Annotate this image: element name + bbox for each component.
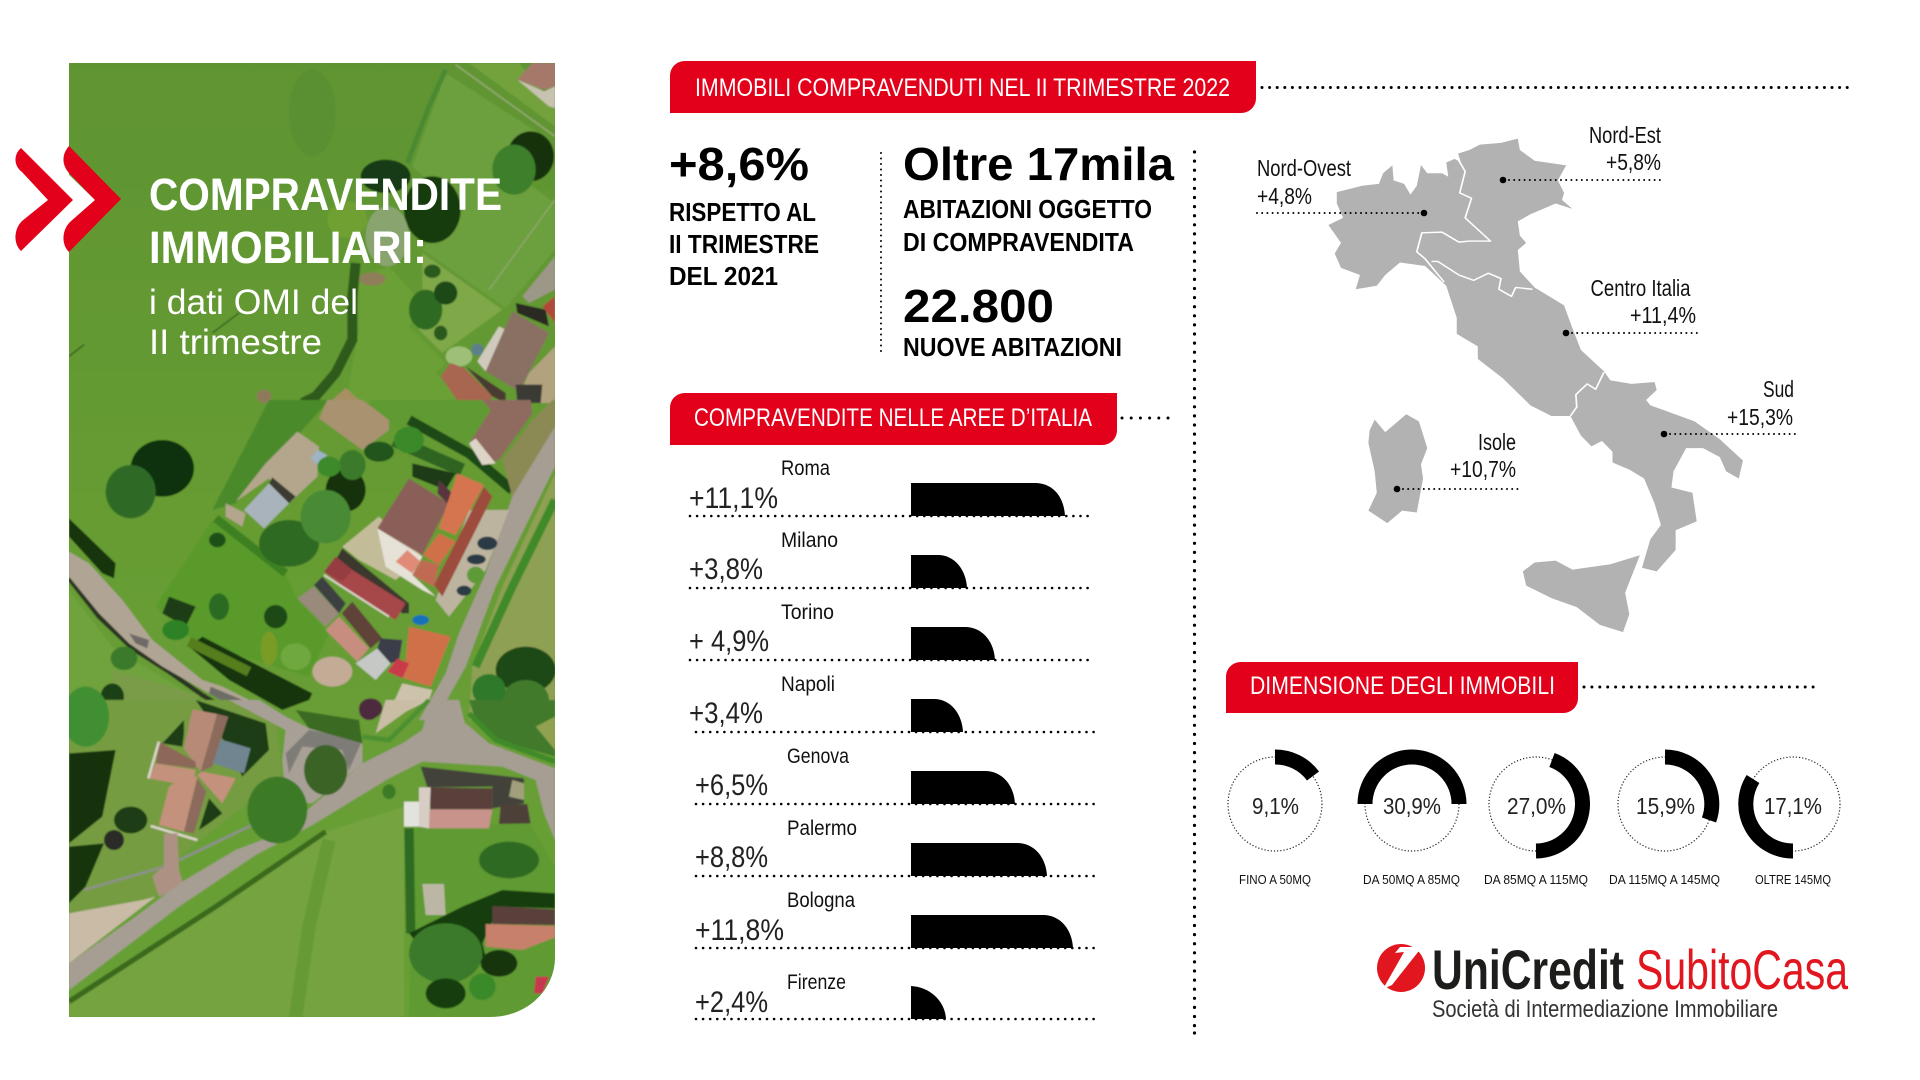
row: Roma: +11,1% — [689, 482, 778, 515]
row: Genova: +6,5% — [695, 769, 768, 802]
map label: Nord-Ovest: Nord-Ovest — [1257, 155, 1351, 181]
donut: oltre 145mq: OLTRE 145MQ — [1755, 872, 1831, 887]
title: i dati OMI del — [149, 283, 358, 322]
donut: da 85mq a 115mq: 27,0% — [1507, 793, 1566, 819]
row: Milano — [689, 529, 1091, 588]
map label: Isole — [1394, 429, 1518, 492]
map label: Isole: +10,7% — [1450, 456, 1516, 482]
heading: immobili compravenduti: IMMOBILI COMPRAVENDUTI NEL II TRIMESTRE 2022 — [695, 74, 1230, 102]
map label: Centro Italia: Centro Italia — [1590, 275, 1691, 301]
donut: da 85mq a 115mq — [1484, 757, 1588, 887]
stat: 22.800: 22.800 — [903, 280, 1054, 332]
stat: +8,6%: RISPETTO AL — [669, 197, 816, 227]
row: Bologna: Bologna — [787, 889, 855, 912]
row: Roma: Roma — [781, 457, 830, 480]
map label: Nord-Est — [1500, 122, 1663, 183]
logo: UniCredit SubitoCasa — [1377, 938, 1849, 1023]
map label: Sud — [1661, 376, 1795, 437]
row: Palermo: Palermo — [787, 817, 857, 840]
heading: dimensione degli immobili: DIMENSIONE DEGLI IMMOBILI — [1250, 672, 1555, 700]
donut: da 85mq a 115mq: DA 85MQ A 115MQ — [1484, 872, 1588, 887]
row: Roma — [689, 457, 1091, 516]
donut: fino a 50mq: 9,1% — [1252, 793, 1299, 819]
heading: aree d'italia: COMPRAVENDITE NELLE AREE D’ITALIA — [694, 404, 1092, 432]
bar chart: compravendite per città — [689, 457, 1096, 1019]
stat: oltre 17mila: Oltre 17mila — [903, 138, 1174, 190]
donut: da 115mq a 145mq: DA 115MQ A 145MQ — [1609, 872, 1720, 887]
heading: aree d'italia — [670, 393, 1168, 445]
map label: Sud: +15,3% — [1727, 404, 1793, 430]
icon: double red chevron — [15, 146, 121, 252]
logo: UniCredit SubitoCasa: Società di Intermediazione Immobiliare — [1432, 996, 1778, 1023]
map label: Centro Italia: +11,4% — [1630, 302, 1696, 328]
row: Torino: + 4,9% — [689, 625, 769, 658]
stat: 22.800 — [903, 280, 1122, 362]
map label: Nord-Ovest: +4,8% — [1257, 183, 1312, 209]
donut: da 115mq a 145mq: 15,9% — [1636, 793, 1695, 819]
row: Torino: Torino — [781, 601, 834, 624]
stat: oltre 17mila — [903, 138, 1174, 257]
panel: aerial photo of houses and fields — [60, 55, 565, 1025]
logo: UniCredit SubitoCasa: SubitoCasa — [1636, 938, 1849, 1001]
donut: da 50mq a 85mq — [1363, 757, 1460, 887]
row: Torino — [689, 601, 1091, 660]
map label: Sud: Sud — [1763, 376, 1794, 402]
heading: dimensione degli immobili — [1226, 662, 1818, 713]
stat: oltre 17mila: DI COMPRAVENDITA — [903, 227, 1134, 257]
stat: oltre 17mila: ABITAZIONI OGGETTO — [903, 194, 1152, 224]
donut: da 50mq a 85mq: DA 50MQ A 85MQ — [1363, 872, 1460, 887]
row: Firenze — [695, 971, 1096, 1019]
map label: Isole: Isole — [1478, 429, 1516, 455]
row: Milano: +3,8% — [689, 553, 763, 586]
row: Napoli: Napoli — [781, 673, 835, 696]
donut: da 50mq a 85mq: 30,9% — [1383, 793, 1441, 819]
title: IMMOBILIARI: — [149, 222, 427, 273]
logo: UniCredit SubitoCasa: UniCredit — [1432, 938, 1624, 1001]
map label: Nord-Est: Nord-Est — [1589, 122, 1661, 148]
map label: Nord-Ovest — [1257, 155, 1427, 216]
map label: Nord-Est: +5,8% — [1606, 149, 1661, 175]
stat: +8,6%: DEL 2021 — [669, 261, 778, 291]
row: Palermo: +8,8% — [695, 841, 768, 874]
donut: oltre 145mq: 17,1% — [1764, 793, 1822, 819]
title — [149, 169, 502, 362]
row: Genova: Genova — [787, 745, 849, 768]
title: COMPRAVENDITE — [149, 169, 502, 220]
row: Bologna: +11,8% — [695, 914, 784, 947]
title: II trimestre — [149, 323, 322, 362]
row: Milano: Milano — [781, 529, 838, 552]
stat: +8,6%: +8,6% — [669, 138, 809, 190]
row: Napoli: +3,4% — [689, 697, 763, 730]
heading: immobili compravenduti — [670, 61, 1848, 113]
stat: +8,6% — [669, 138, 819, 291]
row: Bologna — [695, 889, 1096, 948]
stat: +8,6%: II TRIMESTRE — [669, 229, 819, 259]
donut: fino a 50mq — [1228, 757, 1322, 887]
row: Palermo — [695, 817, 1096, 876]
donut: fino a 50mq: FINO A 50MQ — [1239, 872, 1311, 887]
row: Napoli — [689, 673, 1096, 732]
donut: da 115mq a 145mq — [1609, 757, 1720, 887]
map of Italy — [1257, 122, 1795, 632]
stat: 22.800: NUOVE ABITAZIONI — [903, 332, 1122, 362]
map label: Centro Italia — [1563, 275, 1697, 336]
row: Genova — [695, 745, 1096, 804]
row: Firenze: +2,4% — [695, 986, 768, 1019]
row: Firenze: Firenze — [787, 971, 846, 994]
donut: oltre 145mq — [1746, 757, 1840, 887]
